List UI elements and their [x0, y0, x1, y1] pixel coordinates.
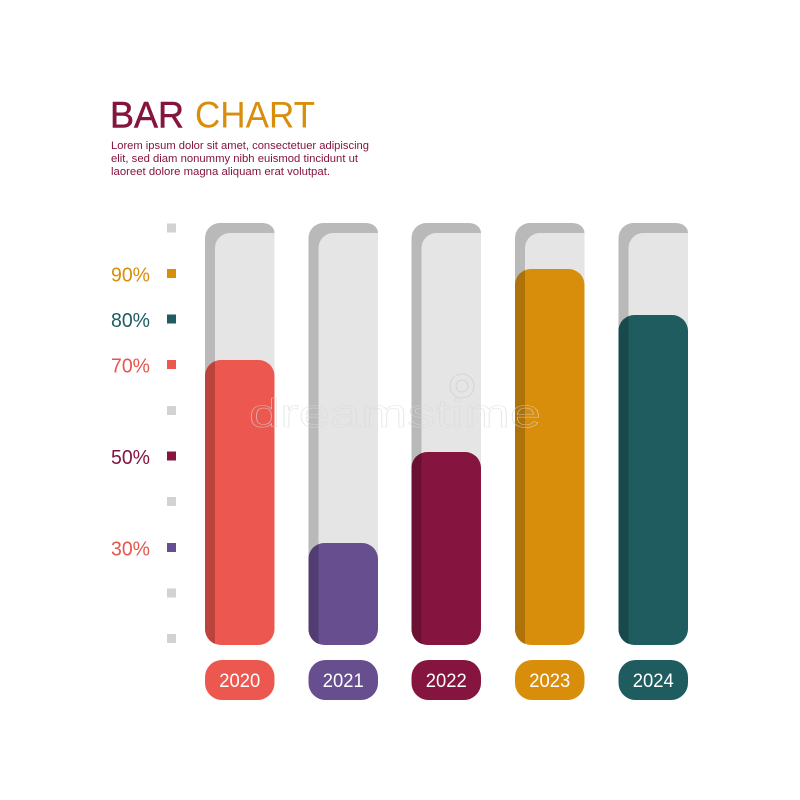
- description text: laoreet dolore magna aliquam erat volutpat.: [111, 166, 330, 178]
- description text: [111, 140, 369, 178]
- percentage axis labels: 90%: [111, 264, 150, 286]
- percentage axis labels: [111, 264, 150, 560]
- year label: 2024: [618, 660, 688, 700]
- percentage axis labels: 50%: [111, 447, 150, 469]
- watermark: [249, 374, 541, 436]
- percentage axis labels: 80%: [111, 310, 150, 332]
- title: [110, 94, 315, 135]
- description text: Lorem ipsum dolor sit amet, consectetuer adipiscing: [111, 140, 369, 152]
- year label: 2023: [515, 660, 584, 700]
- year label: 2020: 2020: [219, 671, 260, 692]
- infographic canvas: [112, 102, 688, 700]
- percentage axis labels: 70%: [111, 356, 150, 378]
- bar: 2023, 90%: [515, 223, 584, 645]
- watermark: dreamstime: [249, 392, 541, 436]
- title: CHART: [195, 94, 315, 135]
- bar: 2021, 30%: [308, 223, 378, 645]
- year label: 2024: 2024: [633, 671, 674, 692]
- year label: 2022: [412, 660, 481, 700]
- title: BAR: [110, 94, 184, 135]
- year label: 2023: 2023: [529, 671, 570, 692]
- year label: 2020: [205, 660, 274, 700]
- bar: 2024, 80%: [618, 223, 688, 645]
- bar: 2022, 50%: [412, 223, 481, 645]
- description text: elit, sed diam nonummy nibh euismod tincidunt ut: [111, 153, 358, 165]
- year label: 2021: 2021: [323, 671, 364, 692]
- axis tick markers: [167, 224, 176, 643]
- bar: 2020, 70%: [205, 223, 274, 645]
- year label: 2022: 2022: [426, 671, 467, 692]
- percentage axis labels: 30%: [111, 538, 150, 560]
- year label: 2021: [308, 660, 378, 700]
